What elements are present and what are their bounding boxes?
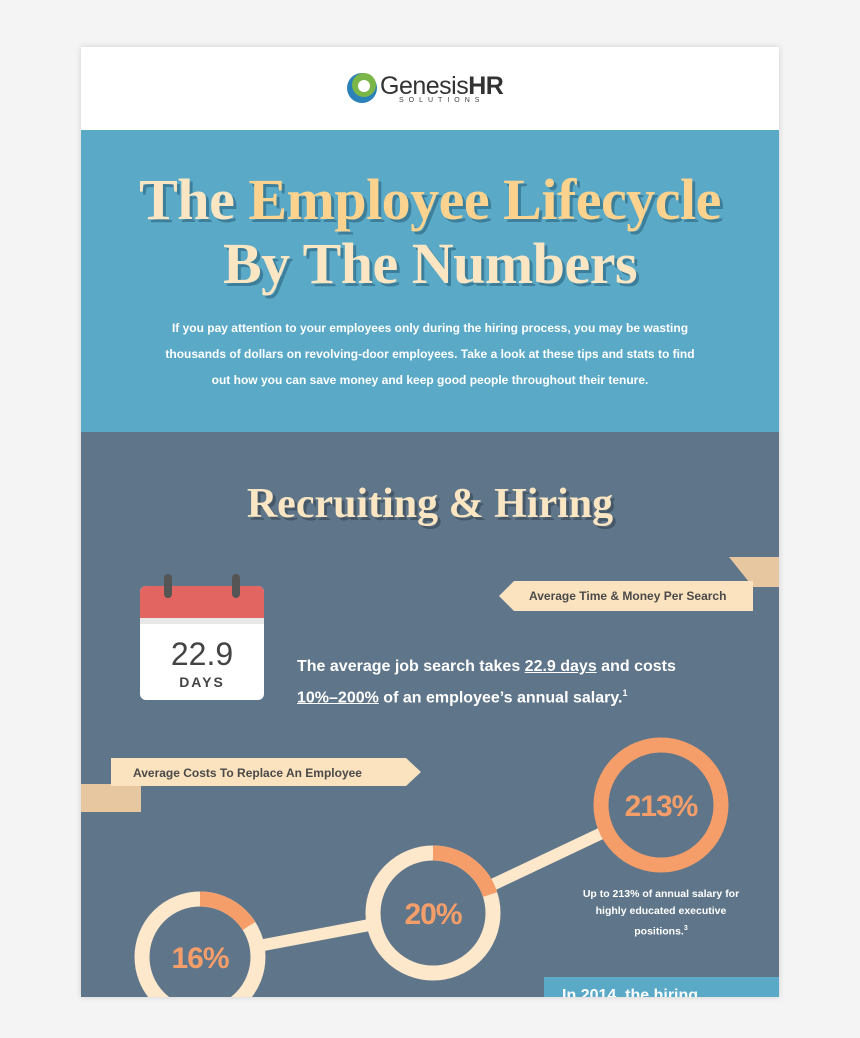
ribbon: time & money: Average Time & Money Per Search bbox=[529, 589, 726, 603]
logo text: GenesisHR bbox=[380, 72, 503, 100]
icon: calendar: DAYS bbox=[179, 674, 225, 690]
intro text: If you pay attention to your employees only during the hiring process, you may be wasting thousands of dollars on revolving-door employees. Take a look at these tips and stats to find out how you can save money and keep good people throughout their tenure. bbox=[165, 321, 695, 387]
213%: 213% bbox=[625, 790, 698, 823]
icon: logo mark bbox=[347, 73, 377, 103]
title: The Employee Lifecycle bbox=[139, 167, 721, 232]
stat text: The average job search takes 22.9 days and costs 10%–200% of an employee’s annual salary.1 bbox=[297, 658, 676, 706]
chart: cost circles bbox=[134, 738, 728, 997]
card bbox=[81, 47, 779, 997]
ribbon: time & money bbox=[499, 557, 779, 611]
header: logo: SOLUTIONS bbox=[399, 97, 484, 104]
icon: calendar bbox=[140, 574, 264, 700]
20%: 20% bbox=[404, 898, 462, 931]
title bbox=[139, 167, 723, 298]
icon: calendar: 22.9 bbox=[171, 636, 233, 672]
panel: recruiting bbox=[81, 432, 779, 997]
heading: Recruiting & Hiring bbox=[247, 481, 613, 527]
213% bbox=[601, 745, 721, 865]
panel: intro bbox=[81, 130, 779, 432]
20% bbox=[373, 853, 493, 973]
16%: 16% bbox=[171, 942, 229, 975]
header: logo bbox=[81, 47, 779, 130]
title: By The Numbers bbox=[223, 231, 637, 296]
16% bbox=[142, 899, 258, 1015]
callout: 2014 bbox=[544, 977, 779, 1017]
ribbon: replace costs: Average Costs To Replace An Employee bbox=[133, 766, 362, 780]
ribbon: replace costs bbox=[81, 758, 421, 812]
caption 213%: Up to 213% of annual salary for highly educated executive positions.3 bbox=[583, 888, 739, 938]
